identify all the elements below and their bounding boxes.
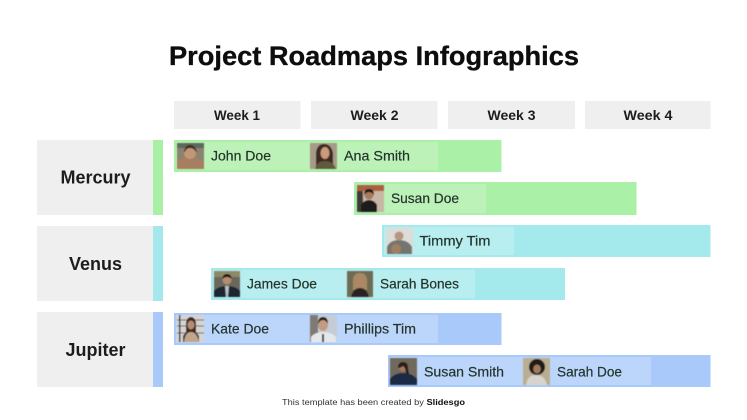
avatar: Timmy Tim	[386, 228, 413, 254]
header: week 2: Week 2	[350, 107, 399, 123]
name: Sarah Doe: Sarah Doe	[557, 364, 622, 380]
name: Sarah Bones: Sarah Bones	[380, 276, 459, 292]
name: Ana Smith: Ana Smith	[344, 148, 410, 164]
header: week 4: Week 4	[624, 107, 673, 123]
header: week 2	[311, 101, 438, 129]
avatar: Susan Doe	[357, 185, 384, 212]
panel: Mercury label: Mercury	[60, 166, 131, 188]
name: Timmy Tim: Timmy Tim	[420, 232, 490, 248]
name: Susan Smith: Susan Smith	[424, 364, 504, 380]
roadmap bar: Susan Doe	[354, 182, 636, 215]
avatar: Kate Doe	[177, 315, 204, 342]
credit line: This template has been created by Slidesgo	[282, 398, 465, 407]
week headers	[174, 101, 710, 129]
panel: Mercury label	[37, 140, 163, 215]
panel: Jupiter label	[37, 312, 163, 387]
avatar: Phillips Tim	[310, 315, 337, 342]
name: Kate Doe: Kate Doe	[211, 320, 269, 336]
avatar: Susan Smith	[390, 358, 417, 385]
header: week 4	[585, 101, 710, 129]
avatar: Sarah Bones	[347, 271, 373, 297]
avatar: Ana Smith	[310, 143, 337, 169]
roadmap bar: John Doe and Ana Smith	[174, 140, 502, 172]
name: James Doe: James Doe	[247, 276, 317, 292]
panel: Jupiter label: Jupiter	[66, 339, 126, 360]
name: Susan Doe: Susan Doe	[391, 190, 459, 206]
avatar: James Doe	[214, 271, 240, 297]
roadmap bar: Kate Doe and Phillips Tim	[174, 313, 502, 345]
header: week 1: Week 1	[214, 107, 260, 123]
name: John Doe: John Doe	[211, 148, 271, 164]
header: week 3	[448, 101, 575, 129]
roadmap bar: James Doe and Sarah Bones	[211, 268, 565, 300]
roadmap bar: Susan Smith and Sarah Doe	[388, 355, 710, 387]
title: Project Roadmaps Infographics	[169, 41, 579, 71]
panel: Venus label	[37, 226, 163, 301]
header: week 1	[174, 101, 300, 129]
header: week 3: Week 3	[488, 107, 536, 123]
panel: Venus label: Venus	[69, 253, 122, 274]
roadmap bar: Timmy Tim	[382, 225, 710, 257]
avatar: John Doe	[177, 143, 204, 169]
avatar: Sarah Doe	[523, 358, 550, 385]
name: Phillips Tim: Phillips Tim	[344, 320, 416, 336]
